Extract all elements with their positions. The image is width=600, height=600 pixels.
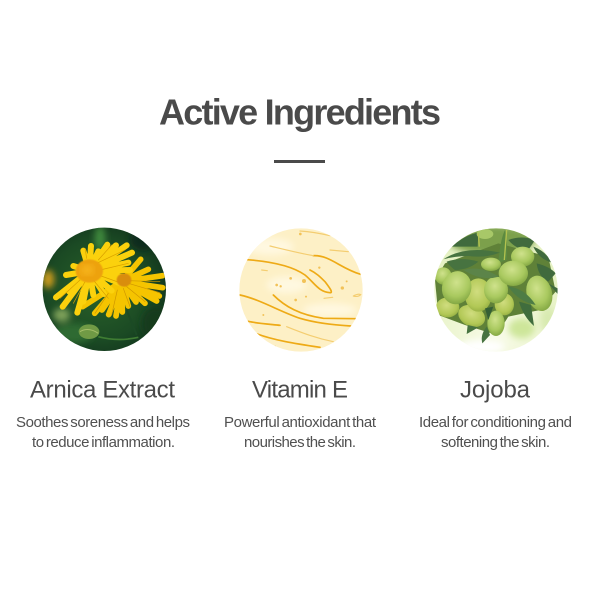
description: arnica: Soothes soreness and helps: [16, 414, 190, 431]
upper fruit: [511, 247, 534, 267]
label: Vitamin E: Vitamin E: [252, 376, 348, 404]
second flower petals: [83, 259, 163, 316]
description: vitamin e: nourishes the skin.: [244, 434, 356, 451]
description: vitamin e: [224, 414, 377, 451]
description: jojoba: [419, 414, 572, 451]
description: jojoba: softening the skin.: [441, 434, 550, 451]
icon: jojoba fruit photo: [432, 225, 562, 355]
backing shadow: [435, 243, 556, 335]
icon: vitamin e gel texture: [237, 225, 367, 355]
title divider: [274, 160, 325, 163]
description: vitamin e: Powerful antioxidant that: [224, 414, 377, 431]
description: jojoba: Ideal for conditioning and: [419, 414, 572, 431]
icon: arnica flower photo: [42, 228, 166, 351]
fruit: [435, 267, 452, 285]
front leaves: [443, 250, 536, 343]
first flower petals: [56, 245, 132, 313]
description: arnica: to reduce inflammation.: [32, 434, 175, 451]
panel: jojoba: [419, 225, 572, 451]
description: arnica: [16, 414, 190, 451]
panel: vitamin e: [224, 225, 377, 451]
label: Arnica Extract: Arnica Extract: [30, 376, 175, 404]
second flower disc: [117, 273, 131, 287]
title: Active Ingredients: [159, 92, 441, 132]
leaves: [452, 230, 558, 294]
first flower disc: [76, 259, 103, 283]
stems and bud: [98, 337, 138, 339]
label: Jojoba: Jojoba: [460, 376, 531, 404]
panel: arnica extract: [16, 225, 190, 451]
